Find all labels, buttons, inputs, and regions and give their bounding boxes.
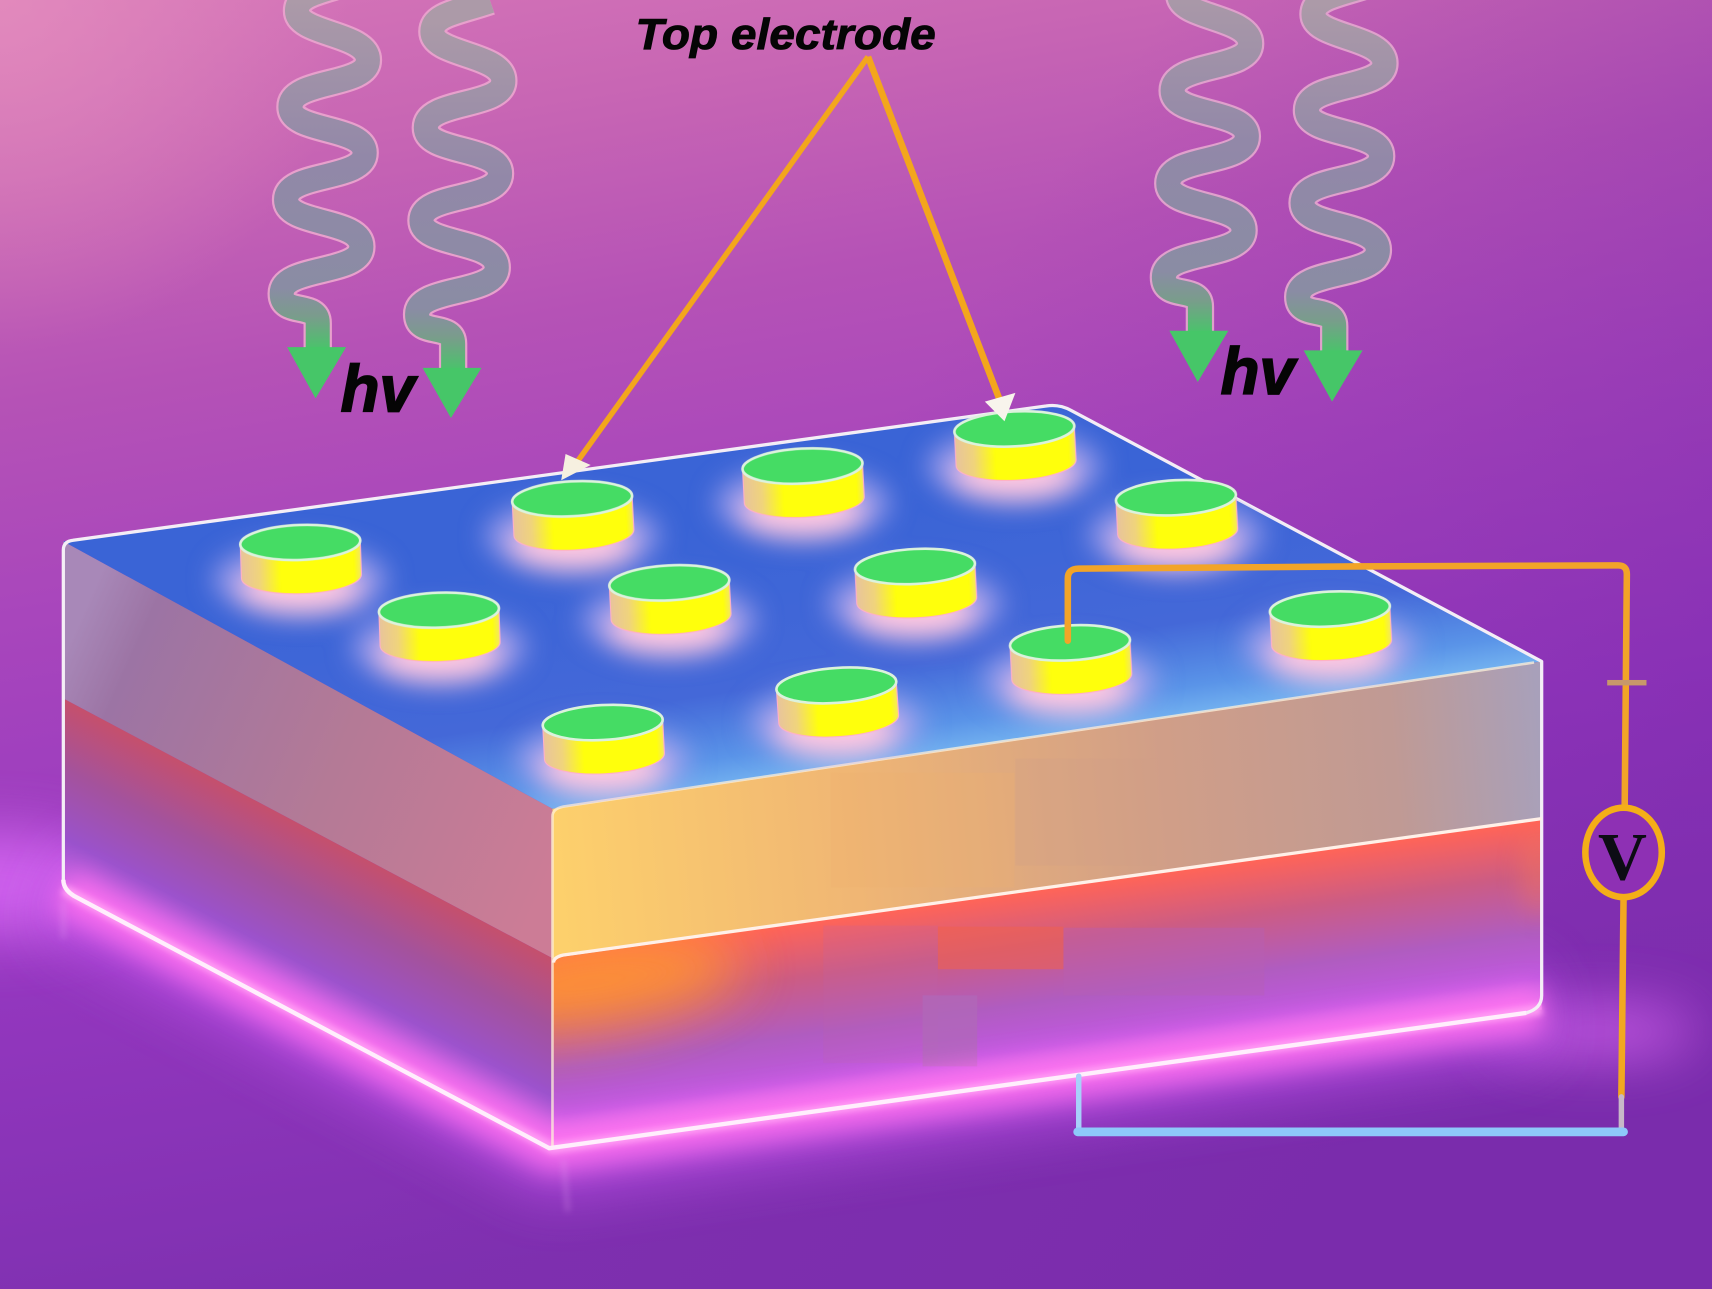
- inner and edge glow along bottom: [63, 890, 1542, 1148]
- terminal mark: [1607, 680, 1646, 685]
- label: Top electrode: Top electrode: [635, 10, 936, 59]
- orange glow at layer front corner: [432, 830, 1553, 1047]
- pointer arrow to left electrode: [561, 57, 868, 480]
- top face: [63, 404, 1542, 809]
- block outline: [63, 405, 1542, 1148]
- voltmeter: V: [1598, 820, 1647, 895]
- right face upper layer: [552, 661, 1542, 958]
- left face upper layer: [63, 541, 552, 958]
- label: hv right: hv: [1221, 335, 1298, 408]
- light wave with arrow, right 1: [1164, 0, 1250, 382]
- voltmeter: [1585, 808, 1662, 897]
- top electrode discs: [240, 408, 1393, 777]
- light wave with arrow, left 1: [282, 0, 368, 398]
- light wave with arrow, right 2: [1298, 0, 1384, 402]
- device block: [63, 404, 1553, 1212]
- pointer arrow to right electrode: [868, 57, 1015, 421]
- light wave with arrow, left 2: [417, 1, 503, 418]
- right face lower layer: [552, 819, 1542, 1148]
- external circuit wire: [1068, 565, 1627, 1132]
- outer floor glow: [63, 890, 1542, 1148]
- label: hv left: hv: [341, 352, 418, 425]
- floor light streaks: [63, 900, 568, 1212]
- left face lower layer: [63, 699, 552, 1148]
- glow under discs: [213, 429, 1417, 797]
- image artefact patches: [823, 759, 1264, 1066]
